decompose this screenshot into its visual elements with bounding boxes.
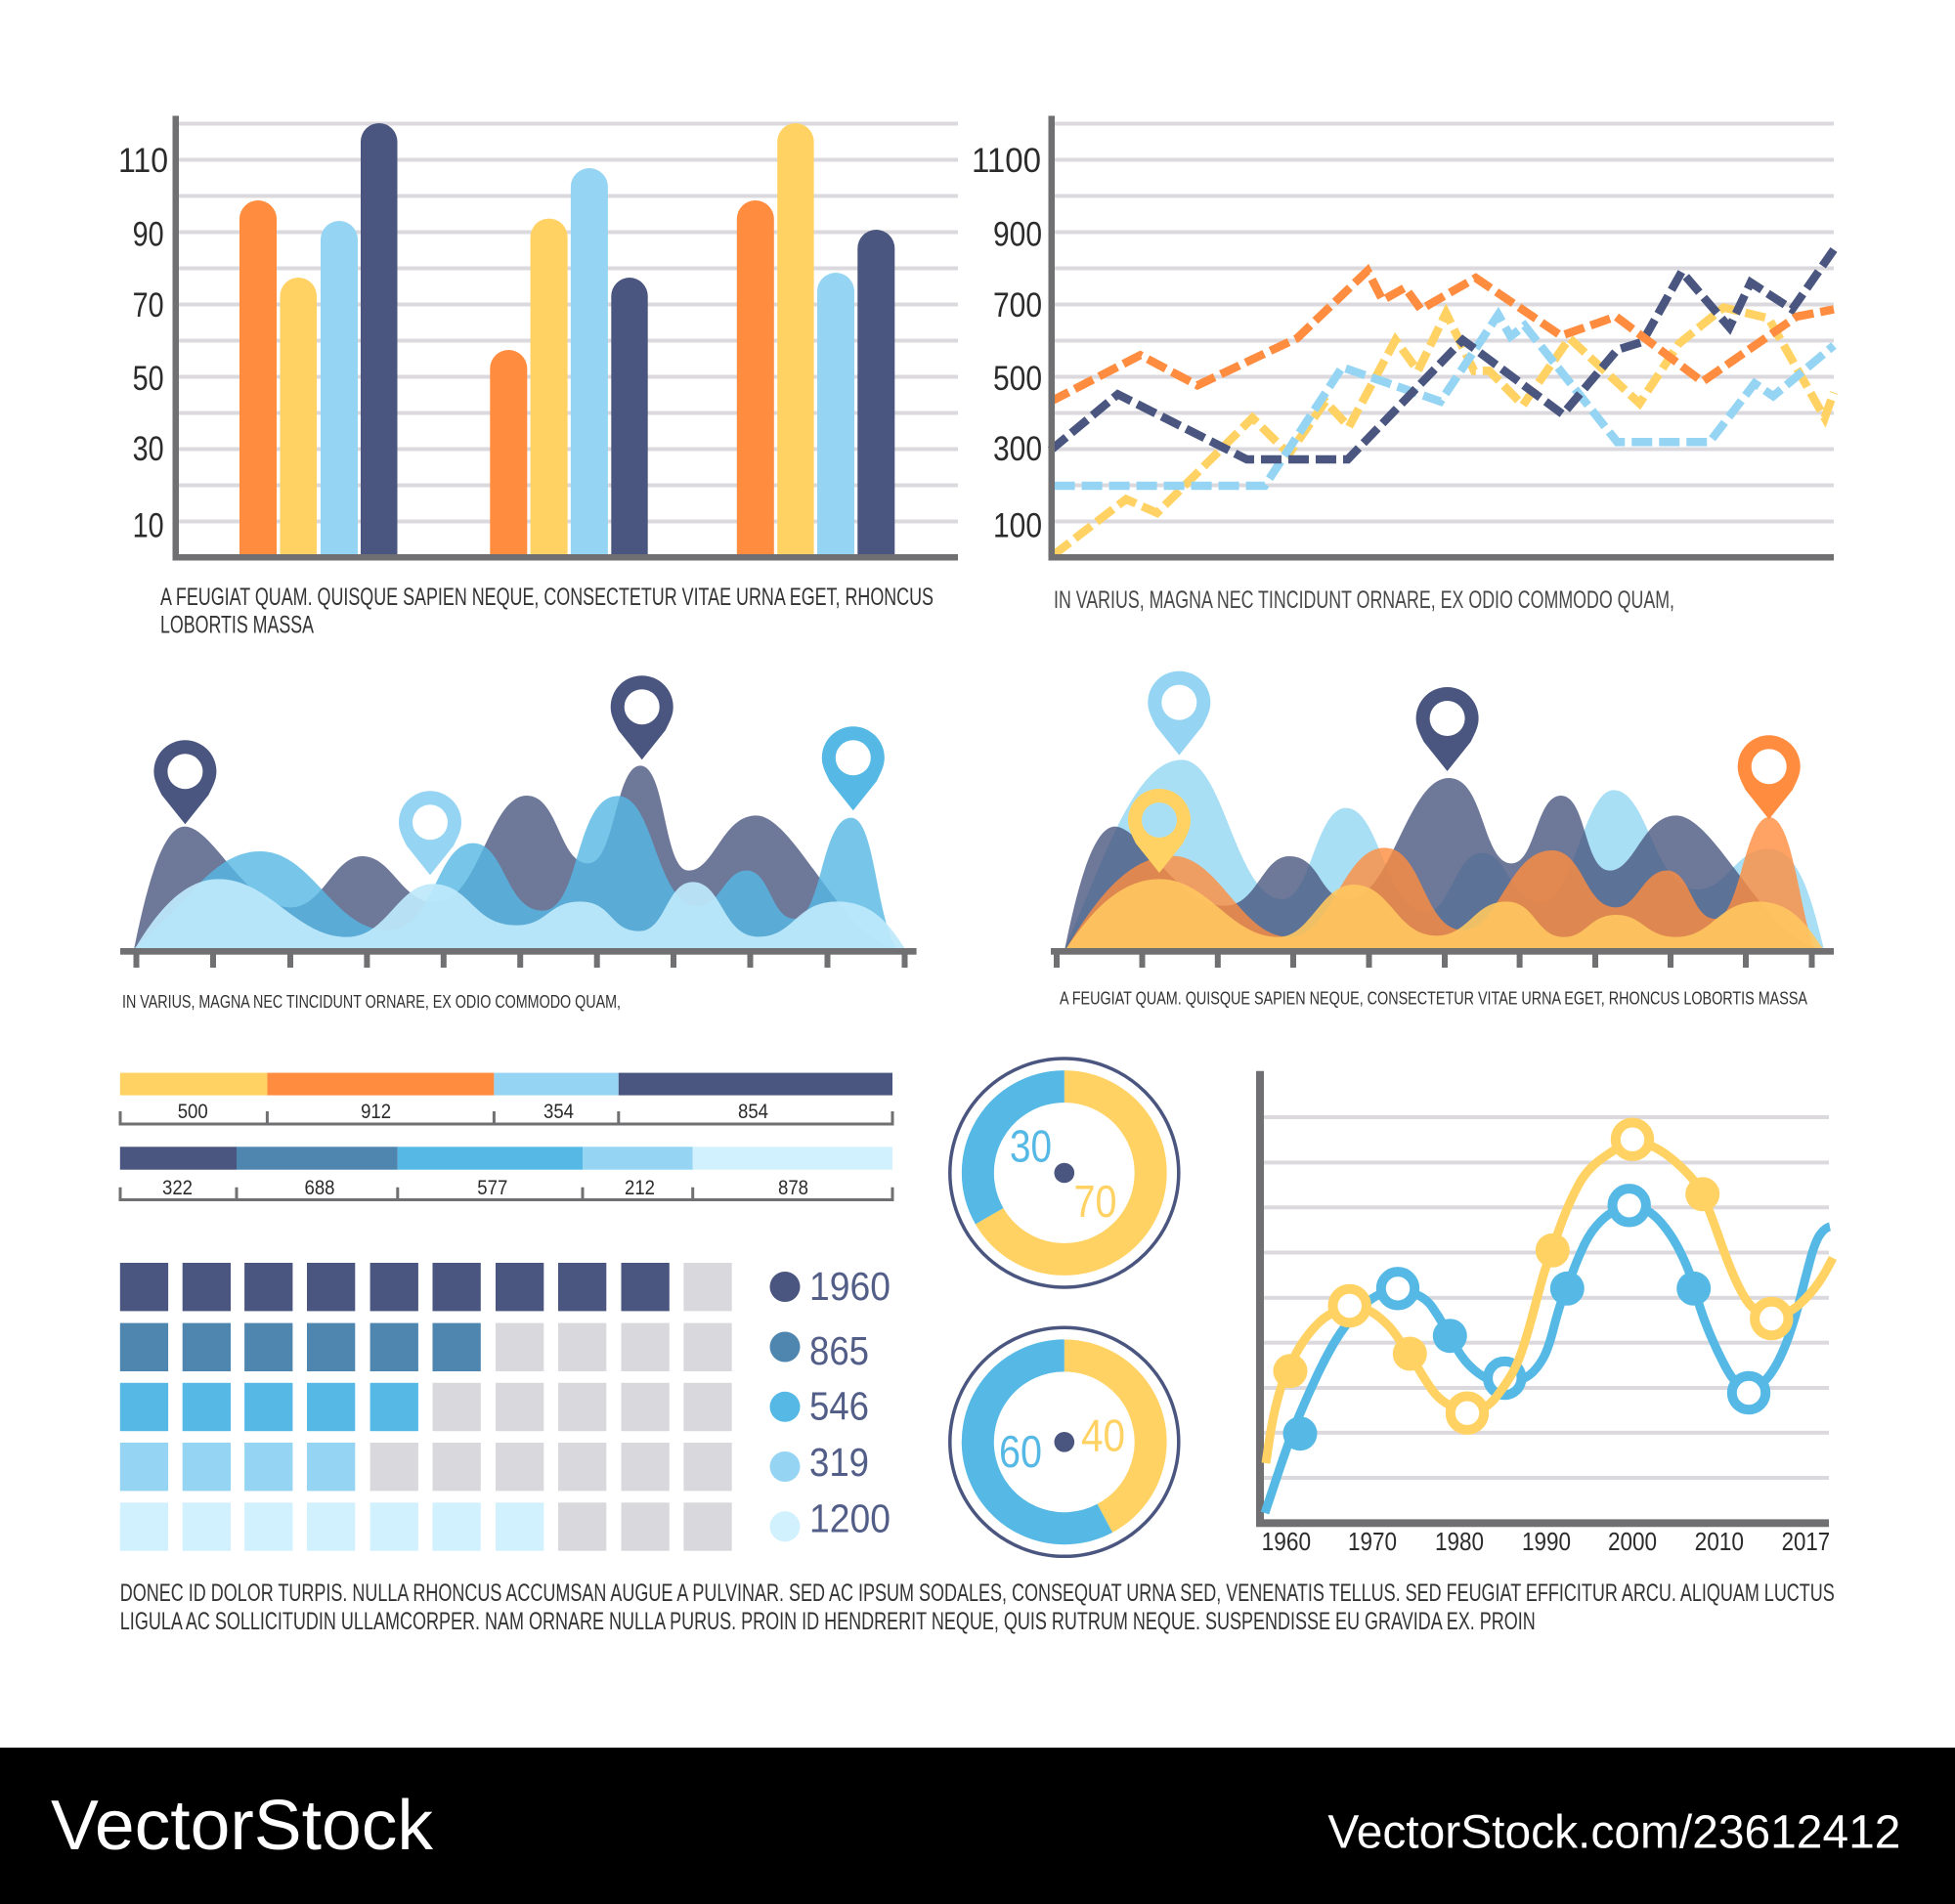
donut chart: 30 / 70: 70	[1073, 1176, 1116, 1227]
area layers	[1064, 759, 1824, 948]
dashed series	[1051, 249, 1834, 555]
area layers	[134, 765, 904, 948]
x axis labels: 2010	[1695, 1529, 1744, 1556]
legend: 865	[809, 1328, 869, 1373]
axes	[172, 115, 958, 561]
legend: 546	[809, 1384, 869, 1429]
yellow series	[1266, 1122, 1833, 1463]
y axis labels	[118, 142, 168, 545]
y axis labels: 10	[133, 506, 164, 545]
caption: LOBORTIS MASSA	[160, 612, 314, 639]
caption: IN VARIUS, MAGNA NEC TINCIDUNT ORNARE, EX ODIO COMMODO QUAM,	[1054, 586, 1674, 614]
stacked bar: warm palette	[120, 1073, 892, 1124]
y axis labels: 50	[133, 360, 164, 398]
axis with ticks	[120, 948, 917, 968]
stacked bar: blue palette: 212	[625, 1176, 655, 1199]
stacked bar: warm palette: 354	[543, 1100, 574, 1123]
legend: 319	[809, 1440, 869, 1485]
stacked bar: blue palette	[120, 1147, 892, 1200]
donut chart: 30 / 70	[950, 1059, 1179, 1287]
y axis labels: 30	[133, 430, 164, 468]
y axis labels: 500	[993, 360, 1042, 398]
x axis labels: 1960	[1262, 1529, 1311, 1556]
icon: map pin light blue	[1148, 671, 1210, 756]
legend: 1960	[809, 1264, 891, 1309]
panel: blue area chart	[120, 675, 917, 1012]
y axis labels: 70	[133, 286, 164, 325]
icon: map pin navy tall	[611, 675, 673, 759]
bars: group 2	[490, 168, 648, 555]
stacked bar: warm palette: 854	[738, 1100, 768, 1123]
y axis labels: 300	[993, 430, 1042, 468]
bottom paragraph	[120, 1579, 1835, 1635]
bars: group 3	[737, 123, 894, 555]
axes	[1048, 115, 1834, 561]
footer band: VectorStock	[51, 1787, 434, 1865]
panel: smooth line chart	[1256, 1071, 1833, 1556]
caption: IN VARIUS, MAGNA NEC TINCIDUNT ORNARE, EX ODIO COMMODO QUAM,	[122, 991, 621, 1012]
legend: 1200	[809, 1495, 891, 1540]
panel: dashed line chart	[972, 115, 1834, 614]
caption	[160, 584, 934, 639]
footer band	[0, 1748, 1955, 1904]
icon: map pin blue	[822, 726, 885, 810]
x axis labels: 1980	[1435, 1529, 1484, 1556]
axes	[1256, 1071, 1829, 1527]
stacked bar: blue palette: 577	[477, 1176, 507, 1199]
icon: map pin navy	[1416, 687, 1479, 771]
y axis labels: 900	[993, 216, 1042, 254]
donut chart: 60 / 40	[950, 1327, 1179, 1556]
waffle grid	[120, 1263, 732, 1551]
panel: orange area chart	[1051, 671, 1834, 1009]
y axis labels: 1100	[972, 142, 1041, 180]
y axis labels: 100	[993, 506, 1042, 545]
y axis labels: 110	[118, 142, 168, 180]
bars: group 1	[239, 123, 397, 555]
legend	[770, 1264, 891, 1541]
donut chart: 60 / 40: 40	[1081, 1409, 1125, 1460]
donut chart: 30 / 70: 30	[1010, 1121, 1052, 1172]
caption: A FEUGIAT QUAM. QUISQUE SAPIEN NEQUE, CONSECTETUR VITAE URNA EGET, RHONCUS	[160, 584, 934, 611]
x axis labels	[1262, 1529, 1830, 1556]
stacked bar: blue palette: 878	[778, 1176, 808, 1199]
icon: map pin navy	[153, 740, 216, 824]
stacked bar: warm palette: 500	[178, 1100, 208, 1123]
icon: map pin light blue	[399, 791, 461, 875]
stacked bar: warm palette: 912	[361, 1100, 391, 1123]
x axis labels: 1990	[1522, 1529, 1571, 1556]
icon: map pin yellow	[1128, 789, 1191, 873]
panel: bar chart	[118, 115, 958, 639]
y axis labels: 700	[993, 286, 1042, 325]
donut chart: 60 / 40: 60	[999, 1426, 1042, 1477]
x axis labels: 2017	[1782, 1529, 1830, 1556]
y axis labels	[972, 142, 1042, 545]
footer band: VectorStock.com/23612412	[1327, 1807, 1900, 1859]
axis with ticks	[1051, 948, 1834, 968]
y axis labels: 90	[133, 216, 164, 254]
blue series	[1265, 1189, 1830, 1513]
x axis labels: 1970	[1348, 1529, 1397, 1556]
icon: map pin orange	[1738, 735, 1801, 819]
stacked bar: blue palette: 688	[305, 1176, 335, 1199]
stacked bar: blue palette: 322	[162, 1176, 193, 1199]
x axis labels: 2000	[1608, 1529, 1657, 1556]
